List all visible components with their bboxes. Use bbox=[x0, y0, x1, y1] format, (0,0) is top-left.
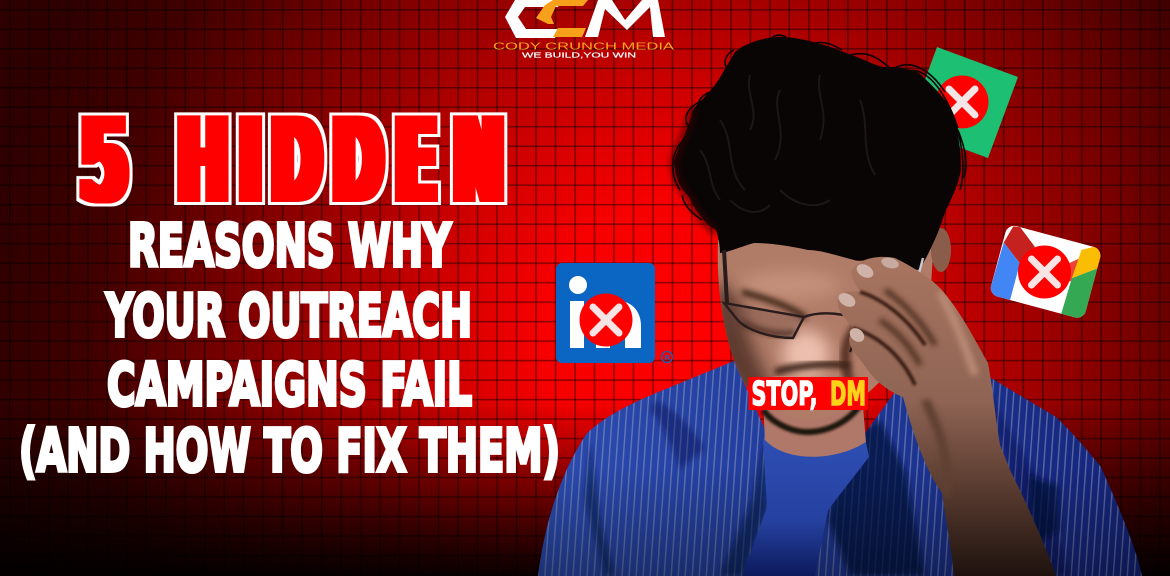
logo: Cody Crunch Media bbox=[493, 0, 675, 60]
heading: 5 HIDDEN: HIDDEN bbox=[178, 93, 504, 229]
icon: green app tile with red X bbox=[907, 47, 1018, 158]
icon: Gmail envelope with red X bbox=[989, 224, 1102, 320]
title bbox=[19, 93, 560, 485]
subheading line 4: (AND HOW TO FIX THEM) bbox=[19, 416, 560, 485]
logo name: CODY CRUNCH MEDIA bbox=[493, 42, 675, 52]
person: frustrated man holding his forehead bbox=[530, 35, 1150, 576]
subheading line 2: YOUR OUTREACH bbox=[105, 281, 472, 350]
beard bbox=[763, 405, 860, 432]
heading: 5 HIDDEN: 5 bbox=[80, 93, 128, 229]
t-shirt bbox=[742, 438, 869, 576]
eyeglasses bbox=[724, 250, 923, 352]
logo mark: CCM bbox=[505, 0, 665, 38]
logo tagline: WE BUILD,YOU WIN bbox=[522, 50, 636, 60]
icon: LinkedIn logo with red X: R bbox=[664, 354, 670, 362]
label: STOP, DM: STOP, bbox=[752, 374, 818, 413]
ear bbox=[931, 228, 951, 272]
hair bbox=[673, 35, 966, 270]
icon: LinkedIn logo with red X bbox=[556, 263, 672, 363]
label: STOP, DM: DM bbox=[830, 374, 866, 413]
neck bbox=[763, 395, 866, 457]
face bbox=[718, 240, 932, 393]
shirt: blue striped button-up bbox=[530, 355, 1150, 576]
hand on forehead and forearm bbox=[836, 256, 1056, 576]
subheading line 3: CAMPAIGNS FAIL bbox=[107, 350, 472, 419]
subheading line 1: REASONS WHY bbox=[128, 211, 452, 280]
